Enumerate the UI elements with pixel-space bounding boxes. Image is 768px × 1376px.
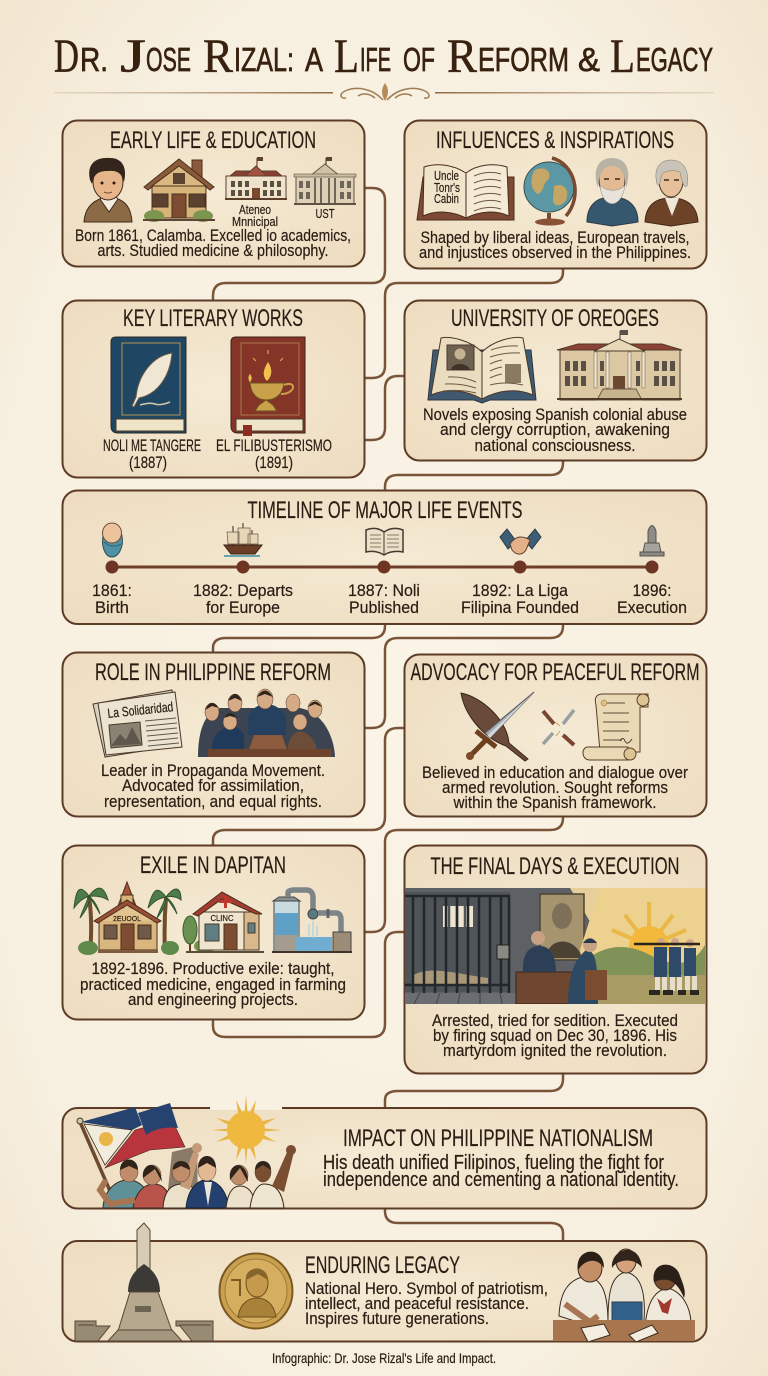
panel: enduring legacy [62, 1223, 706, 1342]
icon: La Solidaridad newspaper: La Solidaridad [107, 699, 174, 721]
icon: handshake [500, 529, 541, 554]
body: influences: and injustices observed in the Philippines. [419, 243, 691, 262]
heading: timeline: TIMELINE OF MAJOR LIFE EVENTS [248, 497, 522, 524]
icon: broken crossed weapons [543, 710, 574, 745]
body: final days: Arrested, tried for sedition. Executed [432, 1011, 678, 1030]
icon: La Solidaridad newspaper [93, 690, 182, 757]
heading: literary works: KEY LITERARY WORKS [123, 305, 303, 332]
body: university [423, 405, 687, 455]
icon: execution monument [640, 526, 664, 556]
title: L [334, 30, 359, 83]
panel: impact on Philippine nationalism [62, 1095, 706, 1208]
icon: pen and sword [461, 692, 534, 761]
title: IFE [360, 42, 391, 79]
body: role [101, 761, 325, 811]
title: EGACY [636, 42, 713, 79]
title: OF [403, 42, 435, 79]
icon: reform scroll [583, 694, 649, 760]
body: final days: martyrdom ignited the revolution. [443, 1041, 667, 1060]
body: final days [432, 1011, 678, 1060]
icon: Philippine flag sun rays [210, 1095, 282, 1164]
icon: Uncle Tom's Cabin book: Cabin [434, 191, 459, 206]
icon: bearded thinker portrait [587, 158, 638, 226]
body: early life [75, 226, 351, 260]
body: legacy [305, 1279, 548, 1328]
label: Ateneo Municipal: Ateneo [239, 202, 271, 217]
title: R. [80, 42, 108, 79]
body: impact [323, 1152, 679, 1191]
label: Noli Me Tangere [103, 436, 201, 472]
title: A [305, 42, 324, 79]
title: R [447, 30, 477, 83]
label: Noli Me Tangere: NOLI ME TANGERE [103, 436, 201, 455]
icon: family house [143, 159, 215, 222]
body: advocacy: Believed in education and dialogue over [422, 763, 688, 782]
icon: Rizal monument [75, 1223, 213, 1341]
icon: Uncle Tom's Cabin book: Tonr's [434, 180, 460, 195]
body: university: national consciousness. [474, 436, 636, 455]
icon: Uncle Tom's Cabin book [417, 165, 514, 220]
footer caption: Infographic: Dr. Jose Rizal's Life and Impact. [272, 1350, 496, 1366]
body: role: representation, and equal rights. [104, 792, 322, 811]
body: impact: His death unified Filipinos, fueling the fight for [323, 1152, 664, 1174]
event: 1892 [461, 581, 579, 617]
panel: early life and education [62, 120, 364, 266]
icon: open book [366, 528, 403, 555]
panel: role in Philippine reform [62, 652, 364, 816]
body: role: Leader in Propaganda Movement. [101, 761, 325, 780]
icon: Rizal coin [220, 1254, 292, 1328]
title: R [203, 30, 233, 83]
icon: students studying [553, 1249, 695, 1342]
icon: Uncle Tom's Cabin book: Uncle [434, 168, 459, 183]
body: influences: Shaped by liberal ideas, European travels, [420, 228, 690, 247]
title: L [610, 30, 635, 83]
body: exile: 1892-1896. Productive exile: taught, [92, 959, 334, 978]
body: role: Advocated for assimilation, [122, 776, 304, 795]
icon: palm trees and school: 2EUOOL [113, 914, 141, 923]
icon: Noli Me Tangere book [111, 337, 186, 433]
panel: the final days and execution [404, 846, 706, 1074]
event: 1861: 1861: [92, 581, 132, 600]
panel: university of oreoges [404, 300, 706, 460]
illustration: prison cell, trial and firing squad [405, 888, 705, 1004]
body: advocacy: within the Spanish framework. [453, 793, 656, 812]
title ornament [54, 83, 714, 101]
icon: UST building [294, 157, 356, 205]
title [54, 30, 713, 83]
heading: role: ROLE IN PHILIPPINE REFORM [95, 659, 331, 686]
event: 1861 [92, 581, 132, 617]
heading: impact: IMPACT ON PHILIPPINE NATIONALISM [343, 1125, 653, 1152]
event: 1896: 1896: [632, 581, 672, 600]
icon: clinic: CLINC [210, 914, 234, 923]
event: 1882 [193, 581, 293, 617]
title: & [578, 42, 600, 79]
label: El Filibusterismo: (1891) [255, 453, 293, 472]
heading: exile: EXILE IN DAPITAN [140, 852, 286, 879]
event: 1882: for Europe [206, 598, 280, 617]
body: university: Novels exposing Spanish colonial abuse [423, 405, 687, 424]
icon: flag bearer crowd [77, 1103, 296, 1208]
icon: open illustrated novel [428, 338, 536, 403]
icon: powdered wig portrait [645, 160, 698, 226]
body: legacy: National Hero. Symbol of patriotism, [305, 1279, 548, 1298]
body: final days: by firing squad on Dec 30, 1896. His [433, 1026, 677, 1045]
icon: swaddled baby [102, 523, 122, 557]
event: 1887: 1887: Noli [348, 581, 420, 600]
event: 1892: Filipina Founded [461, 598, 579, 617]
icon: palm trees and school [74, 882, 181, 955]
heading: legacy: ENDURING LEGACY [305, 1252, 460, 1279]
title: EFORM [478, 42, 569, 79]
event: 1892: 1892: La Liga [472, 581, 568, 600]
body: advocacy: armed revolution. Sought reforms [442, 778, 668, 797]
panel: exile in Dapitan [62, 846, 364, 1020]
timeline bar [106, 560, 658, 574]
event: 1887: Published [349, 598, 419, 617]
icon: reform meeting [198, 689, 335, 757]
panel: timeline of major life events [62, 490, 706, 624]
icon: Ateneo building [225, 157, 287, 200]
heading: early life: EARLY LIFE & EDUCATION [110, 127, 316, 154]
body: legacy: Inspires future generations. [305, 1309, 489, 1328]
body: exile: practiced medicine, engaged in farming [80, 975, 346, 994]
icon: sailing ship [224, 523, 262, 556]
event: 1896 [617, 581, 687, 617]
icon: university building [557, 330, 682, 400]
title: OSE [146, 42, 191, 79]
panel: key literary works [62, 300, 364, 478]
icon: young Rizal [84, 158, 132, 222]
panel: advocacy for peaceful reform [404, 654, 706, 816]
panel: influences and inspirations [404, 120, 706, 268]
event: 1861: Birth [95, 598, 129, 617]
body: advocacy [422, 763, 688, 812]
body: legacy: intellect, and peaceful resistance. [305, 1294, 529, 1313]
heading: university: UNIVERSITY OF OREOGES [451, 305, 659, 332]
title: IZAL: [234, 42, 294, 79]
event: 1887 [348, 581, 420, 617]
body: influences [419, 228, 691, 262]
body: impact: independence and cementing a national identity. [323, 1169, 679, 1191]
body: early life: arts. Studied medicine & philosophy. [98, 241, 328, 260]
body: exile: and engineering projects. [128, 990, 298, 1009]
icon: water system [272, 890, 352, 953]
icon: El Filibusterismo book [231, 337, 305, 436]
label: El Filibusterismo [216, 436, 332, 472]
event: 1896: Execution [617, 598, 687, 617]
icon: globe [524, 158, 575, 226]
title: D [54, 30, 79, 83]
connectors [213, 188, 563, 1241]
body: exile [80, 959, 346, 1009]
label: El Filibusterismo: EL FILIBUSTERISMO [216, 436, 332, 455]
label: Mnnicipal: Mnnicipal [232, 214, 278, 229]
body: early life: Born 1861, Calamba. Excelled io academics, [75, 226, 351, 245]
event: 1882: 1882: Departs [193, 581, 293, 600]
icon: clinic [183, 892, 264, 953]
label: Noli Me Tangere: (1887) [129, 453, 167, 472]
label: UST: UST [316, 206, 335, 221]
title: J [120, 30, 146, 83]
body: university: and clergy corruption, awakening [440, 420, 670, 439]
